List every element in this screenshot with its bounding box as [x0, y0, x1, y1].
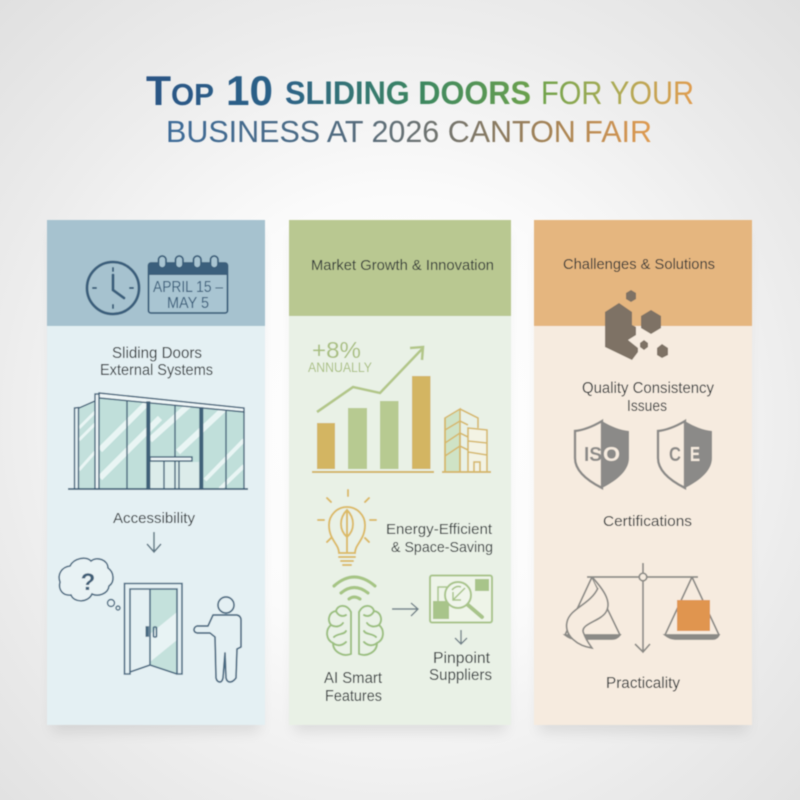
- icon: calendar: MAY 5: [167, 295, 209, 312]
- stat: plus 8 percent annually: [308, 337, 373, 375]
- icon: brain: [327, 606, 383, 655]
- title: T: [146, 67, 171, 114]
- icon: iso shield: [575, 421, 629, 488]
- label: energy-efficient and space-saving: [386, 521, 493, 556]
- arrow: growth trend: [317, 347, 423, 412]
- heading: challenges and solutions: Challenges & Solutions: [563, 256, 715, 273]
- label: ai smart features: [324, 670, 383, 705]
- stat: plus 8 percent annually: ANNUALLY: [308, 359, 373, 375]
- heading: sliding doors external systems: Sliding Doors: [112, 345, 202, 362]
- label: certifications: Certifications: [603, 513, 692, 530]
- arrow: down to suppliers: [455, 630, 467, 644]
- icon: person: [194, 597, 241, 682]
- icon: supplier map with magnifier: [430, 576, 492, 622]
- panel: challenges and solutions: [534, 220, 752, 725]
- title: [146, 67, 694, 149]
- icon: ce shield: [658, 421, 712, 488]
- icon: ce shield: E: [690, 444, 700, 466]
- icon: glass building: [68, 393, 248, 489]
- icon: balance scale: [565, 563, 719, 652]
- icon: clock: [87, 262, 139, 314]
- title: BUSINESS AT 2026 CANTON FAIR: [166, 114, 652, 149]
- icon: double door: [124, 584, 182, 674]
- icon: wifi: [334, 577, 375, 599]
- label: pinpoint suppliers: Suppliers: [429, 667, 492, 684]
- panel: market growth: [289, 220, 511, 725]
- heading: market growth and innovation: Market Growth & Innovation: [311, 257, 494, 274]
- icon: calendar: APRIL 15 –: [153, 279, 223, 296]
- title: FOR YOUR: [541, 75, 694, 111]
- label: energy-efficient and space-saving: Energy-Efficient: [386, 521, 493, 538]
- icon: energy bulb: [318, 490, 376, 565]
- heading: sliding doors external systems: External Systems: [100, 362, 213, 379]
- icon: calendar: [148, 256, 228, 313]
- label: ai smart features: AI Smart: [324, 670, 383, 687]
- panel: event and accessibility: [47, 220, 265, 725]
- icon: ce shield: C: [669, 444, 681, 466]
- label: pinpoint suppliers: Pinpoint: [433, 650, 491, 667]
- label: energy-efficient and space-saving: & Space-Saving: [391, 539, 493, 556]
- title: OP: [171, 77, 214, 112]
- panel header: market growth: [289, 220, 511, 316]
- icon: office buildings: [442, 409, 491, 472]
- icon: iso shield: IS: [584, 444, 602, 466]
- arrow: right: [392, 603, 418, 616]
- panel header: dates: [47, 220, 265, 326]
- label: accessibility: Accessibility: [113, 510, 196, 527]
- icon: broken hexagons: [605, 290, 668, 360]
- panel header: challenges: [534, 220, 752, 326]
- label: quality consistency issues: Quality Consistency: [582, 380, 714, 397]
- label: ai smart features: Features: [325, 688, 382, 705]
- label: quality consistency issues: [582, 380, 714, 415]
- icon: thought bubble: ?: [81, 569, 95, 596]
- label: practicality: Practicality: [606, 675, 680, 692]
- title: SLIDING DOORS: [285, 75, 531, 111]
- label: quality consistency issues: Issues: [627, 398, 667, 415]
- bar chart: [312, 376, 434, 472]
- arrow: down: [147, 532, 161, 552]
- stat: plus 8 percent annually: +8%: [312, 337, 361, 363]
- icon: iso shield: O: [603, 444, 620, 466]
- icon: thought bubble: [59, 558, 120, 610]
- label: pinpoint suppliers: [429, 650, 492, 684]
- heading: sliding doors external systems: [100, 345, 213, 379]
- title: 10: [226, 67, 273, 114]
